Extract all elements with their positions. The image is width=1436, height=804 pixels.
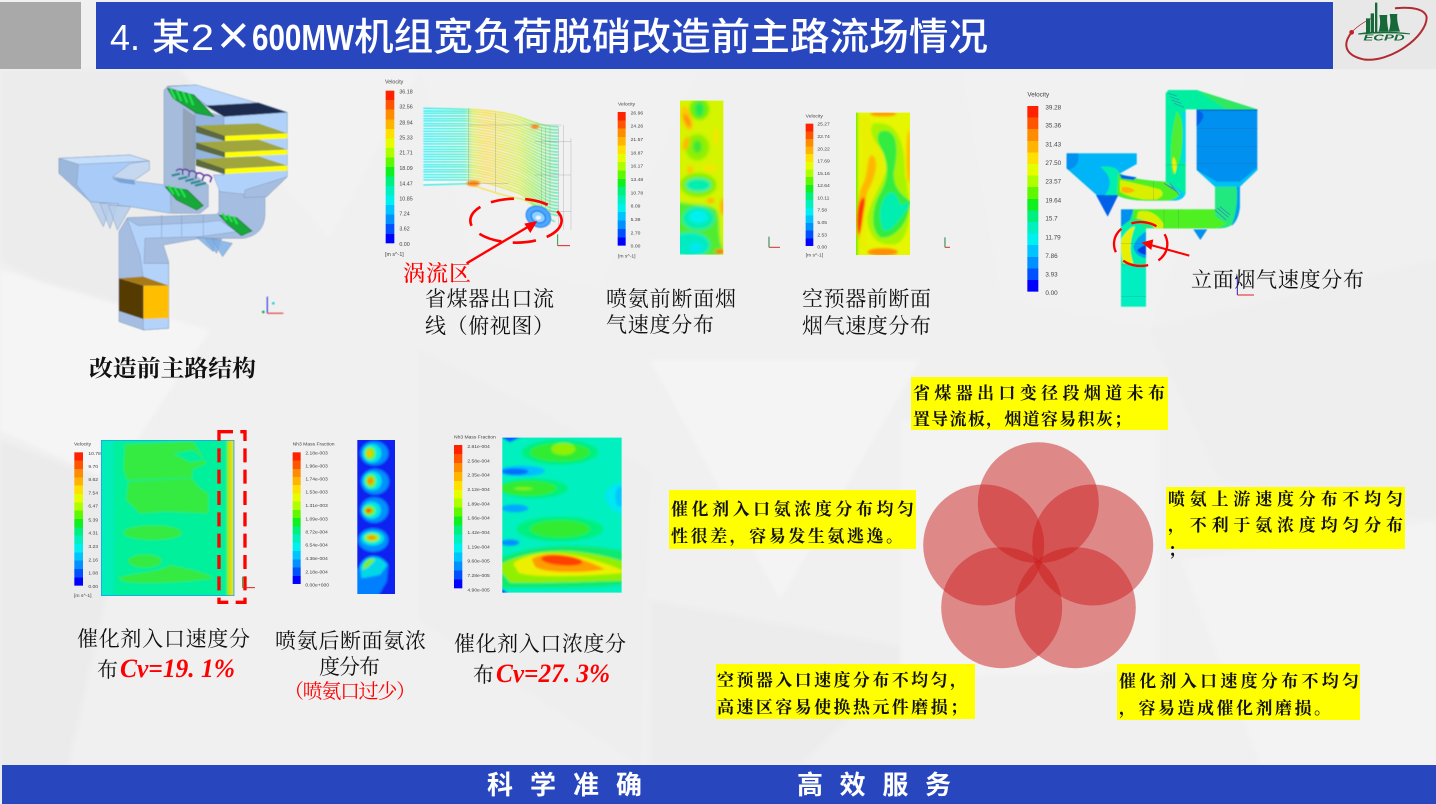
legend: 8.62 [88, 477, 98, 483]
upper left duct [1067, 153, 1186, 201]
hot spots on streamlines [467, 125, 539, 186]
title banner: 2 [191, 17, 214, 58]
callout: catalyst wear [1117, 664, 1360, 720]
legend: before injection: 10.78 [631, 190, 643, 196]
flow field [1067, 90, 1257, 307]
reactor [1197, 109, 1257, 187]
title banner: 机组宽负荷脱硝改造前主路流场情况 [354, 17, 988, 59]
callout: catalyst wear: 催化剂入口速度分布不均匀 [1119, 671, 1359, 691]
callout: economizer outlet: 省煤器出口变径段烟道未布 [913, 383, 1165, 403]
caption: before injection section [606, 287, 736, 337]
vortex marker: dashed ellipse [470, 199, 562, 243]
legend: 31.43 [1045, 141, 1062, 148]
legend: catalyst concentration: 1.66e-004 [467, 516, 490, 522]
callout: air preheater [716, 664, 975, 719]
lower duct [1121, 187, 1240, 307]
lower duct and elbow [119, 190, 265, 330]
legend: catalyst concentration: 2.35e-004 [467, 473, 490, 479]
legend: before injection: 8.09 [631, 204, 641, 210]
legend: air preheater: 20.22 [817, 146, 830, 152]
caption: structure: 改造前主路结构 [89, 356, 256, 381]
legend: before injection: 0.00 [631, 244, 641, 250]
footer banner [2, 765, 1436, 804]
legend: catalyst concentration: 1.89e-004 [467, 501, 490, 507]
legend: before injection: 18.87 [631, 150, 643, 156]
legend: 15.7 [1045, 216, 1058, 223]
legend [293, 441, 335, 589]
legend: 2.18e-004 [305, 569, 328, 575]
marker: dashed circle [1114, 222, 1167, 266]
legend: air preheater: [m s^-1] [806, 253, 824, 259]
legend: 36.18 [399, 90, 413, 96]
legend: 23.57 [1045, 179, 1062, 186]
caption: economizer streamlines [425, 287, 554, 338]
legend: 10.78 [88, 451, 101, 457]
axis triad [769, 237, 780, 247]
legend: 1.96e-003 [305, 463, 328, 469]
legend: 0.00 [88, 584, 98, 590]
catalyst layers: yellow [196, 123, 287, 174]
legend: 25.33 [399, 135, 413, 141]
title banner: 4. [110, 17, 140, 58]
arrow to vortex [467, 221, 537, 263]
legend: Nh3 Mass Fraction [293, 441, 335, 447]
label: vortex zone: 涡流区 [403, 261, 471, 286]
contour map [101, 440, 234, 596]
legend: before injection: 2.70 [631, 230, 641, 236]
vanes and grid [1121, 93, 1257, 297]
legend: 9.70 [88, 464, 98, 470]
legend: [m s^-1] [385, 252, 404, 258]
axis triad [1237, 277, 1254, 295]
legend: before injection: 5.39 [631, 217, 641, 223]
legend: before injection: 13.48 [631, 177, 643, 183]
legend: 5.39 [88, 517, 98, 523]
contour map: catalyst concentration [502, 438, 622, 593]
chart: catalyst inlet velocity [74, 432, 255, 605]
white backing behind inlet lines [423, 108, 468, 185]
legend: 11.79 [1045, 234, 1061, 241]
title banner [96, 2, 1333, 69]
callout: ammonia concentration: 催化剂入口氨浓度分布均匀 [671, 499, 914, 519]
axis triad [262, 297, 283, 313]
legend: 27.50 [1045, 160, 1062, 167]
title banner: 600MW [252, 17, 354, 58]
caption: economizer streamlines: 省煤器出口流 [425, 287, 554, 311]
legend: 6.54e-004 [305, 543, 328, 549]
legend: 21.71 [399, 151, 413, 157]
chart: elevation flue gas velocity [1027, 90, 1257, 307]
legend: before injection: 24.26 [631, 124, 643, 130]
title banner: 某 [152, 17, 190, 58]
callout: ammonia concentration [669, 490, 916, 549]
contour map: air preheater [856, 112, 910, 255]
callout: upstream velocity: 喷氨上游速度分布不均匀 [1168, 489, 1403, 509]
callout: upstream velocity: ，不利于氨浓度均匀分布 [1168, 515, 1403, 536]
legend: 32.56 [399, 105, 413, 111]
legend: 4.31 [88, 531, 98, 537]
legend: air preheater: 0.00 [817, 245, 827, 251]
legend: catalyst concentration: 4.90e-005 [467, 587, 490, 593]
panel: 3D main duct structure [59, 85, 287, 330]
callout: air preheater: 高速区容易使换热元件磨损； [717, 697, 967, 717]
chart: NH3 mass fraction after injection [292, 435, 622, 594]
contour map: before injection [680, 100, 724, 255]
caption: catalyst inlet concentration: 布 [473, 663, 494, 687]
caption: catalyst inlet concentration [454, 632, 626, 688]
legend: catalyst concentration: 2.81e-004 [467, 444, 490, 450]
legend: 39.28 [1045, 105, 1062, 112]
legend: air preheater: 2.53 [817, 232, 827, 238]
caption: elevation velocity: 立面烟气速度分布 [1191, 268, 1364, 292]
footer banner: 科 学 准 确 [487, 770, 642, 800]
caption: catalyst inlet velocity: Cv=19. 1% [120, 654, 235, 683]
legend: 0.00 [399, 242, 410, 248]
legend: [m s^-1] [74, 593, 92, 599]
contour map [357, 440, 395, 594]
tall vertical duct [164, 85, 208, 213]
caption: before injection section: 气速度分布 [606, 313, 714, 337]
legend: 1.08 [88, 571, 98, 577]
legend: 7.54 [88, 490, 98, 496]
legend: air preheater: 25.27 [817, 122, 830, 128]
legend: air preheater: 22.74 [817, 134, 830, 140]
caption: catalyst inlet concentration: Cv=27. 3% [496, 659, 610, 688]
legend: 2.16 [88, 557, 98, 563]
legend: 4.36e-004 [305, 556, 328, 562]
legend: 3.93 [1045, 271, 1058, 278]
footer banner: 高 效 服 务 [797, 770, 951, 800]
grey corner block [0, 2, 81, 69]
legend: before injection: Velocity [618, 102, 636, 108]
legend: 8.72e-004 [305, 529, 328, 535]
axis triad [945, 237, 950, 247]
callout: air preheater: 空预器入口速度分布不均匀， [717, 670, 967, 691]
legend: 6.47 [88, 504, 98, 510]
legend: 18.09 [399, 166, 413, 172]
legend: 1.53e-003 [305, 490, 328, 496]
legend: 1.31e-003 [305, 503, 328, 509]
diagram: five overlapping circles [923, 442, 1153, 668]
legend: 10.85 [399, 197, 413, 203]
top duct [1166, 90, 1257, 201]
legend: 2.18e-003 [305, 450, 328, 456]
caption: catalyst inlet velocity: 催化剂入口速度分 [77, 627, 250, 651]
title banner: × [217, 3, 250, 66]
arrow to low velocity zone [1142, 239, 1189, 256]
legend: 35.36 [1045, 123, 1062, 130]
legend: Velocity [1027, 92, 1050, 99]
legend: 3.23 [88, 544, 98, 550]
legend: catalyst concentration: 7.28e-005 [467, 573, 490, 579]
legend [1027, 92, 1062, 297]
ammonia injection grid [172, 169, 212, 186]
legend: air preheater [806, 114, 830, 259]
legend: catalyst concentration: Nh3 Mass Fraction [454, 434, 496, 440]
caption: NH3 after injection: 度分布 [319, 655, 380, 679]
caption: NH3 after injection: 喷氨后断面氨浓 [275, 629, 426, 653]
legend: catalyst concentration: 2.58e-004 [467, 458, 490, 464]
turning vanes: green [165, 88, 252, 236]
legend: air preheater: 7.58 [817, 208, 827, 214]
caption: catalyst inlet velocity [77, 627, 250, 683]
caption: economizer streamlines: 线（俯视图） [425, 314, 554, 338]
legend: air preheater: 5.05 [817, 220, 827, 226]
legend: air preheater: Velocity [806, 114, 823, 120]
caption: before injection section: 喷氨前断面烟 [606, 287, 736, 311]
logo: ECPD: ECPD [1363, 34, 1405, 43]
legend: before injection: 16.17 [631, 164, 643, 170]
legend: 7.86 [1045, 253, 1058, 260]
legend: before injection [618, 102, 643, 259]
callout: catalyst wear: ，容易造成催化剂磨损。 [1119, 698, 1331, 719]
vortex [523, 202, 554, 231]
streamlines [423, 108, 558, 222]
legend: before injection: 26.96 [631, 110, 643, 116]
caption: NH3 after injection [275, 629, 426, 703]
legend: catalyst concentration: 9.60e-005 [467, 559, 490, 565]
legend: 1.09e-003 [305, 516, 328, 522]
chart: economizer outlet streamlines [385, 80, 571, 263]
legend: 7.24 [399, 212, 410, 218]
legend: 19.64 [1045, 197, 1062, 204]
highlight: dashed red frame [219, 432, 245, 602]
legend [74, 442, 101, 599]
legend [385, 80, 413, 258]
caption: catalyst inlet concentration: 催化剂入口浓度分 [454, 632, 626, 656]
axis triad [558, 234, 570, 246]
legend: catalyst concentration: 2.12e-004 [467, 487, 490, 493]
caption: air preheater section: 空预器前断面 [802, 287, 931, 311]
caption: air preheater section [802, 287, 931, 338]
legend: catalyst concentration: 1.19e-004 [467, 544, 490, 550]
callout: ammonia concentration: 性很差，容易发生氨逃逸。 [671, 526, 903, 547]
legend: air preheater: 15.16 [817, 171, 830, 177]
charts: velocity sections before injection and air preheater [618, 100, 950, 258]
legend: air preheater: 17.69 [817, 159, 830, 165]
legend: 3.62 [399, 227, 410, 233]
legend: before injection: 21.57 [631, 137, 643, 143]
legend: 0.00 [1045, 290, 1058, 297]
callout: upstream velocity: ； [1168, 541, 1185, 560]
logo: ECPD [1333, 0, 1436, 69]
caption: catalyst inlet velocity: 布 [97, 658, 118, 682]
legend: Velocity [74, 442, 92, 448]
callout: upstream velocity [1166, 487, 1405, 560]
legend: 14.47 [399, 181, 413, 187]
flue inlet duct [59, 155, 171, 213]
axis triad [243, 577, 255, 588]
legend: before injection: [m s^-1] [618, 253, 636, 259]
legend: 0.00e+000 [305, 583, 329, 589]
legend: air preheater: 12.64 [817, 183, 830, 189]
legend: catalyst concentration [454, 434, 496, 593]
duct grid [468, 108, 571, 230]
caption: NH3 after injection: （喷氨口过少） [284, 680, 416, 703]
legend: 28.94 [399, 120, 413, 126]
caption: air preheater section: 烟气速度分布 [802, 314, 931, 338]
legend: catalyst concentration: 1.42e-004 [467, 530, 490, 536]
callout: economizer outlet: 置导流板，烟道容易积灰； [913, 409, 1131, 430]
reactor body [167, 85, 287, 198]
callout: economizer outlet [911, 377, 1168, 430]
hoppers [1096, 195, 1118, 217]
catalyst block: orange [119, 277, 169, 319]
legend: Velocity [385, 80, 404, 86]
legend: 1.74e-003 [305, 477, 328, 483]
legend: air preheater: 10.11 [817, 195, 830, 201]
ash hoppers [90, 202, 232, 257]
